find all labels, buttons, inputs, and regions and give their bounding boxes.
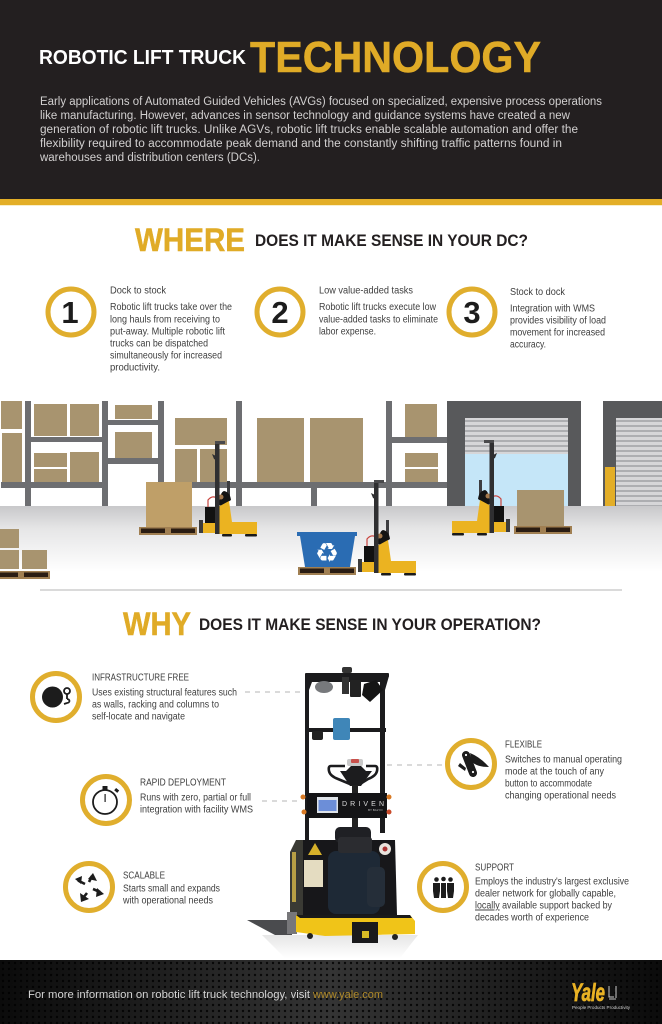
intro text block: flexibility required to accommodate peak demand and the constantly shifting traffic patterns found in <box>40 138 562 150</box>
heading: why <box>123 606 541 642</box>
benefit: infrastructure free: self-locate and navigate <box>92 712 185 722</box>
intro text block: Early applications of Automated Guided Vehicles (AVGs) focused on specialized, expensive process operations <box>40 96 602 108</box>
recycling bin on pallet and truck 2 <box>297 480 416 576</box>
benefit: flexible: changing operational needs <box>505 790 616 802</box>
control panel <box>300 793 392 818</box>
control panel: BY BALYO <box>368 808 383 812</box>
benefit: flexible <box>448 740 622 802</box>
step 3: stock to dock: provides visibility of load <box>510 316 606 326</box>
step 1: dock to stock: trucks can be dispatched <box>110 338 208 350</box>
step 2: low value-added tasks: labor expense. <box>319 326 376 338</box>
title: ROBOTIC LIFT TRUCK <box>39 47 247 69</box>
heading: where: DOES IT MAKE SENSE IN YOUR DC? <box>255 232 528 250</box>
battery body <box>290 827 397 915</box>
step 3: stock to dock: Integration with WMS <box>510 304 595 314</box>
benefit: support: SUPPORT <box>475 862 514 874</box>
step 3: stock to dock: 3 <box>463 295 481 330</box>
benefit: infrastructure free: Uses existing structural features such <box>92 688 237 698</box>
footer text: www.yale.com <box>312 989 383 1001</box>
step 2: low value-added tasks: Low value-added tasks <box>319 286 413 296</box>
step 1: dock to stock: 1 <box>61 295 79 330</box>
icon: group of people <box>433 877 454 898</box>
benefit: support: decades worth of experience <box>475 912 589 924</box>
step 2: low value-added tasks: value-added tasks to eliminate <box>319 314 438 326</box>
benefit: flexible: mode at the touch of any <box>505 766 604 778</box>
logo: Yale: People Products Productivity <box>572 1005 631 1010</box>
title: TECHNOLOGY <box>250 33 541 82</box>
benefit: support <box>420 862 629 924</box>
step 1: dock to stock: simultaneously for increased <box>110 350 222 362</box>
icon: ball and chain <box>42 686 70 708</box>
step 3: stock to dock: accuracy. <box>510 340 546 350</box>
step 1: dock to stock: productivity. <box>110 362 160 374</box>
benefit: flexible: button to accommodate <box>505 778 592 790</box>
heading: where: WHERE <box>135 222 245 258</box>
racking and stacked boxes <box>1 401 448 506</box>
benefit: infrastructure free <box>32 672 237 722</box>
pallet load left edge <box>0 529 50 579</box>
intro text block: warehouses and distribution centers (DCs). <box>39 152 260 164</box>
step 3: stock to dock <box>449 287 606 350</box>
title <box>39 33 541 82</box>
warehouse illustration <box>0 401 662 579</box>
benefit: scalable: with operational needs <box>122 896 213 906</box>
heading: where <box>135 222 528 258</box>
logo: Yale: Yale <box>571 979 605 1007</box>
handle and stem <box>329 759 377 844</box>
step 1: dock to stock: long hauls from receiving to <box>110 314 220 326</box>
benefit: support: Employs the industry's largest exclusive <box>475 876 629 888</box>
heading: why: DOES IT MAKE SENSE IN YOUR OPERATION? <box>199 616 541 634</box>
benefit: infrastructure free: as walls, racking and columns to <box>92 700 219 710</box>
dock door 2 with bollard <box>603 401 662 506</box>
benefit: scalable: SCALABLE <box>123 870 165 882</box>
footer text: For more information on robotic lift truck technology, visit <box>28 989 310 1001</box>
robotic lift truck photo illustration <box>247 667 418 958</box>
benefit: rapid deployment: RAPID DEPLOYMENT <box>140 778 226 788</box>
step 1: dock to stock: Dock to stock <box>110 286 166 296</box>
benefit: scalable: Starts small and expands <box>123 884 220 894</box>
step 1: dock to stock: Robotic lift trucks take over the <box>110 302 232 313</box>
step 2: low value-added tasks <box>257 286 438 338</box>
benefit: rapid deployment <box>82 776 253 824</box>
panel: footer <box>0 960 662 1024</box>
step 3: stock to dock: movement for increased <box>510 328 605 338</box>
intro text block: generation of robotic lift trucks. Unlike AGVs, robotic lift trucks enable scalable automation and offer the <box>40 124 578 136</box>
icon: stopwatch <box>93 786 119 814</box>
panel: dark header <box>0 0 662 206</box>
control panel: DRIVEN <box>342 801 384 808</box>
icon: pocket knife <box>458 753 489 773</box>
benefit: rapid deployment: integration with facility WMS <box>140 804 253 816</box>
intro text block <box>39 96 602 164</box>
recycling bin on pallet and truck 2: ♻ <box>315 538 339 569</box>
mast and sensors <box>305 667 389 840</box>
step 1: dock to stock: put-away. Multiple robotic lift <box>110 326 225 338</box>
benefit: infrastructure free: INFRASTRUCTURE FREE <box>92 672 189 684</box>
benefit: flexible: Switches to manual operating <box>505 754 622 766</box>
benefit: rapid deployment: Runs with zero, partial or full <box>140 792 251 804</box>
yellow base, forks and drive unit <box>247 912 415 943</box>
pallet load and truck 1 <box>139 441 257 536</box>
step 2: low value-added tasks: 2 <box>271 295 289 330</box>
intro text block: like manufacturing. However, advances in sensor technology and guidance systems have created a new <box>40 110 571 122</box>
benefit: support: dealer network for globally capable, <box>475 888 616 900</box>
heading: why: WHY <box>123 606 191 642</box>
dock door 1 <box>447 401 581 506</box>
benefit: scalable <box>66 864 220 910</box>
benefit: flexible: FLEXIBLE <box>505 740 542 750</box>
step 3: stock to dock: Stock to dock <box>510 287 565 298</box>
step 1: dock to stock <box>48 286 232 374</box>
benefit: support: locally available support backed by <box>475 900 612 912</box>
pallet load and truck 3 <box>452 440 572 536</box>
step 2: low value-added tasks: Robotic lift trucks execute low <box>319 302 437 313</box>
icon: expanding arrows <box>75 873 104 902</box>
